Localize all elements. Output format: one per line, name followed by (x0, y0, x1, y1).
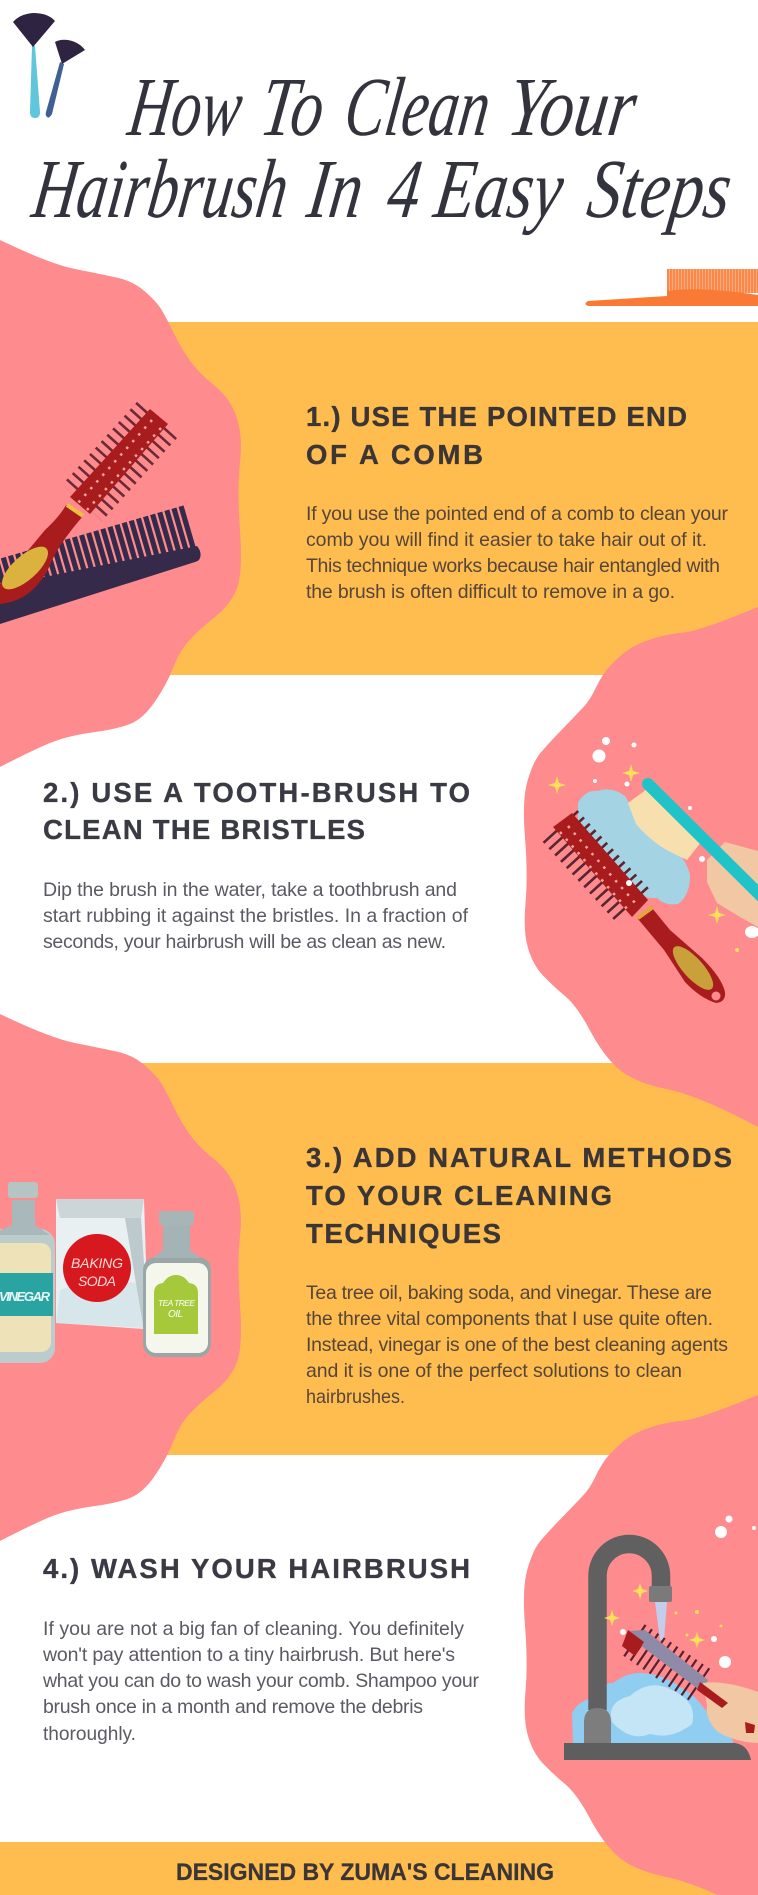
step 4 body: thoroughly. (43, 1723, 136, 1745)
step 3 body: Tea tree oil, baking soda, and vinegar. These are (306, 1282, 712, 1304)
foam (572, 1673, 733, 1743)
band: step 3 background (142, 1063, 758, 1455)
vinegar bottle (0, 1182, 55, 1363)
step 4 body (42, 1618, 480, 1745)
step 1 body: the brush is often difficult to remove in a go. (306, 581, 675, 603)
blob: step 2 pink (524, 607, 758, 1127)
blob: step 1 pink (0, 240, 241, 767)
step 4 body: what you can do to wash your comb. Shampoo your (42, 1670, 480, 1692)
title: 4 (382, 143, 427, 236)
step 2 body: seconds, your hairbrush will be as clean as new. (43, 931, 446, 953)
title: Hairbrush (27, 143, 294, 236)
step 1 body (306, 503, 728, 603)
band: step 1 background (168, 322, 758, 675)
bubbles and sparkles (592, 737, 758, 938)
step 3 body: hairbrushes. (306, 1386, 405, 1408)
bubbles and sparkles (620, 1516, 756, 1668)
brush handle (697, 1682, 728, 1708)
title: To (255, 61, 330, 154)
step 3 heading: TECHNIQUES (306, 1218, 501, 1249)
blob: step 3 pink (0, 1014, 241, 1541)
step 2 body: Dip the brush in the water, take a toothbrush and (43, 879, 457, 901)
step 4 body: brush once in a month and remove the debris (43, 1696, 423, 1718)
step 3 heading: 3.) ADD NATURAL METHODS (306, 1142, 732, 1173)
sink plate (564, 1743, 751, 1760)
illustration: hairbrush and comb (0, 409, 201, 624)
step 1 text (306, 401, 728, 603)
icon: orange comb (586, 269, 758, 306)
illustration: vinegar, baking soda and tea tree oil (0, 1182, 211, 1363)
baking soda bag: BAKING (71, 1255, 123, 1271)
step 2 body (43, 879, 469, 953)
illustration: toothbrush scrubbing hairbrush (548, 737, 758, 1003)
step 3 body (306, 1282, 728, 1408)
step 2 text (43, 777, 470, 953)
step 1 body: comb you will find it easier to take hair out of it. (306, 529, 707, 551)
hairbrush handle (638, 908, 725, 1003)
step 4 body: won't pay attention to a tiny hairbrush. But here's (42, 1644, 455, 1666)
baking soda bag: SODA (78, 1273, 116, 1289)
brush under water (634, 1640, 700, 1685)
icon: makeup fan brushes (13, 13, 85, 118)
step 2 heading: 2.) USE A TOOTH-BRUSH TO (43, 777, 470, 808)
step 2 body: start rubbing it against the bristles. In a fraction of (43, 905, 469, 927)
step 3 heading: TO YOUR CLEANING (306, 1180, 612, 1211)
step 3 body: and it is one of the perfect solutions to clean (306, 1360, 682, 1382)
hairbrush head (553, 813, 648, 917)
title: Easy (429, 143, 570, 236)
tea tree oil bottle: OIL (168, 1309, 183, 1320)
step 3 text (306, 1142, 732, 1408)
band: footer background (0, 1842, 758, 1895)
footer credit: DESIGNED BY ZUMA'S CLEANING (176, 1859, 554, 1886)
hairbrush bristles (560, 826, 635, 908)
toothbrush bristles (628, 789, 702, 860)
foam (578, 789, 690, 904)
toothbrush handle (648, 784, 758, 897)
baking soda bag (56, 1199, 148, 1329)
step 1 body: If you use the pointed end of a comb to clean your (306, 503, 728, 525)
step 3 heading (306, 1142, 732, 1249)
red hairbrush (0, 409, 168, 604)
illustration: washing hairbrush under faucet (564, 1516, 758, 1760)
hand (707, 842, 758, 927)
step 4 text (42, 1553, 480, 1745)
tea tree oil bottle: TEA TREE (158, 1298, 195, 1308)
tea tree oil bottle (143, 1211, 211, 1357)
step 1 body: This technique works because hair entangled with (306, 555, 720, 577)
step 3 body: Instead, vinegar is one of the best cleaning agents (306, 1334, 728, 1356)
step 2 heading (44, 782, 469, 840)
title: Your (502, 61, 643, 154)
blob: step 4 pink (524, 1395, 758, 1895)
water stream (655, 1602, 667, 1640)
step 4 heading: 4.) WASH YOUR HAIRBRUSH (43, 1553, 470, 1584)
step 1 heading: 1.) USE THE POINTED END (306, 401, 687, 432)
step 1 heading: OF A COMB (306, 439, 483, 470)
title: Clean (339, 61, 496, 154)
step 1 heading (306, 406, 686, 464)
step 2 heading: CLEAN THE BRISTLES (43, 814, 365, 845)
title: How (123, 61, 248, 154)
hand (703, 1682, 758, 1743)
dark comb (0, 527, 201, 624)
title: In (302, 143, 369, 236)
step 3 body: the three vital components that I use quite often. (306, 1308, 713, 1330)
step 4 body: If you are not a big fan of cleaning. You definitely (43, 1618, 464, 1640)
vinegar bottle: VINEGAR (0, 1289, 51, 1304)
title (29, 76, 730, 236)
faucet (598, 1544, 661, 1710)
